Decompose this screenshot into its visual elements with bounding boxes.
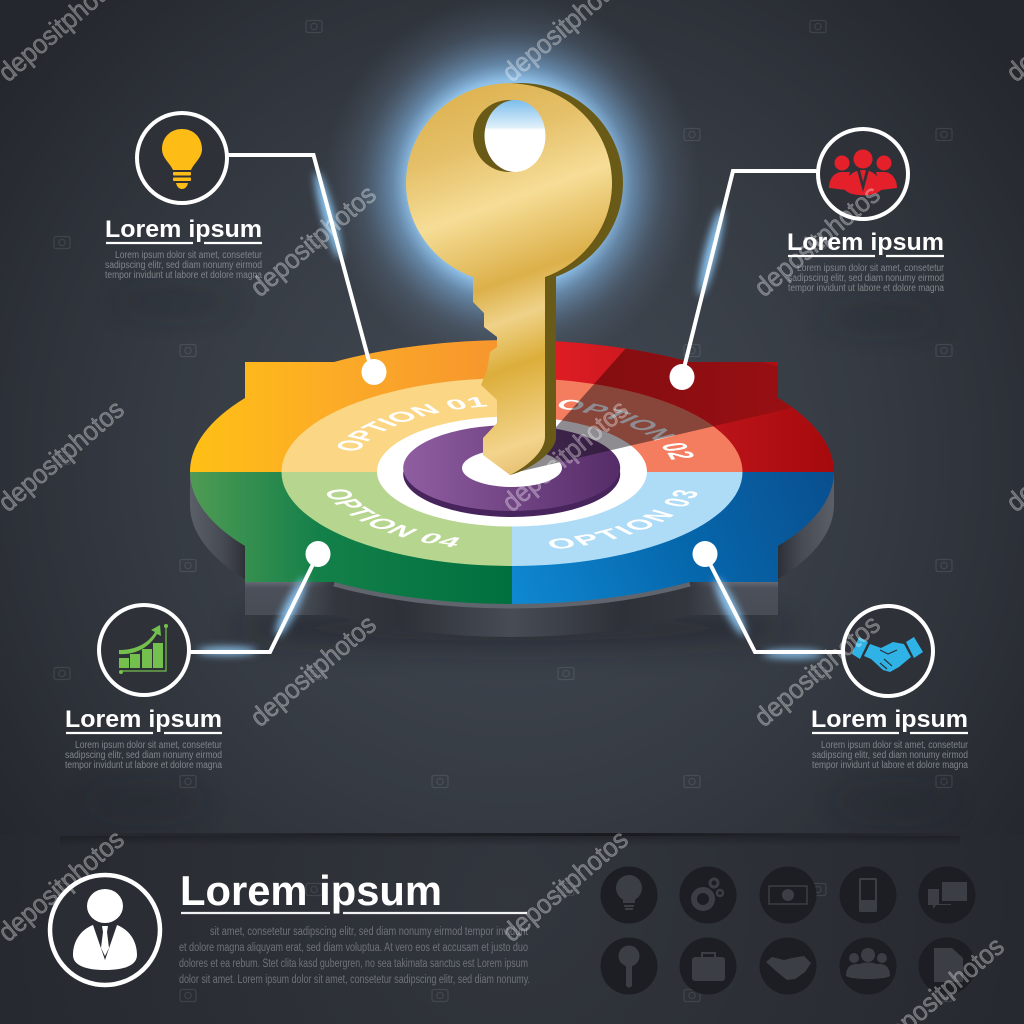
bottom panel bbox=[50, 867, 530, 986]
golden key bbox=[406, 83, 623, 475]
dark icon grid bbox=[600, 866, 976, 994]
depositphotos watermarks: depositphotos bbox=[748, 609, 886, 733]
option ring bbox=[282, 378, 742, 566]
option labels: OPTION 04 bbox=[327, 489, 460, 548]
callout: bottom left: Lorem ipsum dolor sit amet, consetetur bbox=[75, 740, 223, 751]
callout: bottom right bbox=[811, 606, 969, 771]
bottom panel: Lorem ipsum bbox=[180, 867, 442, 914]
icon: businessman bbox=[50, 875, 160, 985]
callout: bottom right: sadipscing elitr, sed diam nonumy eirmod bbox=[812, 750, 968, 761]
option labels: OPTION 03 bbox=[549, 490, 698, 549]
bottom panel: dolores et ea rebum. Stet clita kasd gubergren, no sea takimata sanctus est Lorem ipsum bbox=[179, 958, 528, 970]
plate top quadrants bbox=[190, 340, 834, 604]
callout: bottom left: sadipscing elitr, sed diam nonumy eirmod bbox=[65, 750, 222, 761]
bottom panel: dolor sit amet. Lorem ipsum dolor sit amet, consetetur sadipscing elitr, sed diam nonumy. bbox=[179, 974, 530, 986]
callout: top right: sadipscing elitr, sed diam nonumy eirmod bbox=[788, 273, 944, 284]
callout: top right: tempor invidunt ut labore et dolore magna bbox=[788, 283, 944, 294]
callout: top left: tempor invidunt ut labore et dolore magna bbox=[105, 270, 262, 281]
callout: top right: Lorem ipsum dolor sit amet, consetetur bbox=[797, 263, 945, 274]
depositphotos watermarks: depositphotos bbox=[496, 824, 634, 948]
icon: growth chart bbox=[119, 624, 168, 674]
line flares bbox=[197, 170, 823, 658]
depositphotos watermarks: depositphotos bbox=[496, 394, 634, 518]
plate side bbox=[190, 373, 834, 637]
bottom panel: sit amet, consetetur sadipscing elitr, sed diam nonumy eirmod tempor invidunt bbox=[210, 926, 529, 938]
callout: top left: Lorem ipsum bbox=[105, 216, 262, 243]
callout: bottom right: Lorem ipsum bbox=[811, 706, 968, 733]
key cast shadow bbox=[522, 384, 714, 471]
plate shadow bbox=[232, 606, 792, 650]
callout: top right: Lorem ipsum bbox=[787, 229, 944, 256]
callout: top right bbox=[787, 129, 945, 294]
central disc bbox=[377, 416, 647, 526]
bottom panel: et dolore magna aliquyam erat, sed diam voluptua. At vero eos et accusam et justo duo bbox=[179, 942, 528, 954]
callout: top left bbox=[105, 113, 263, 281]
callout: bottom right: tempor invidunt ut labore et dolore magna bbox=[812, 760, 968, 771]
option labels bbox=[327, 397, 698, 549]
depositphotos watermarks: depositphotos bbox=[748, 179, 886, 303]
callout: bottom left: tempor invidunt ut labore et dolore magna bbox=[65, 760, 222, 771]
callout: top left: Lorem ipsum dolor sit amet, consetetur bbox=[115, 250, 263, 261]
key glow bbox=[322, 0, 702, 373]
callout: bottom left bbox=[65, 605, 223, 771]
soft shadows under text blocks bbox=[85, 294, 955, 811]
icon: light bulb bbox=[162, 129, 202, 189]
option labels: OPTION 02 bbox=[558, 400, 694, 460]
callout: top left: sadipscing elitr, sed diam nonumy eirmod bbox=[105, 260, 262, 271]
callout: bottom right: Lorem ipsum dolor sit amet, consetetur bbox=[821, 740, 969, 751]
icon: team bbox=[829, 150, 897, 195]
option labels: OPTION 01 bbox=[338, 397, 488, 451]
depositphotos watermarks: depositphotos bbox=[244, 179, 382, 303]
callout: bottom left: Lorem ipsum bbox=[65, 706, 222, 733]
icon: handshake bbox=[852, 637, 923, 672]
connector lines bbox=[190, 155, 843, 652]
depositphotos watermarks: depositphotos bbox=[244, 609, 382, 733]
connector dots bbox=[306, 359, 718, 567]
